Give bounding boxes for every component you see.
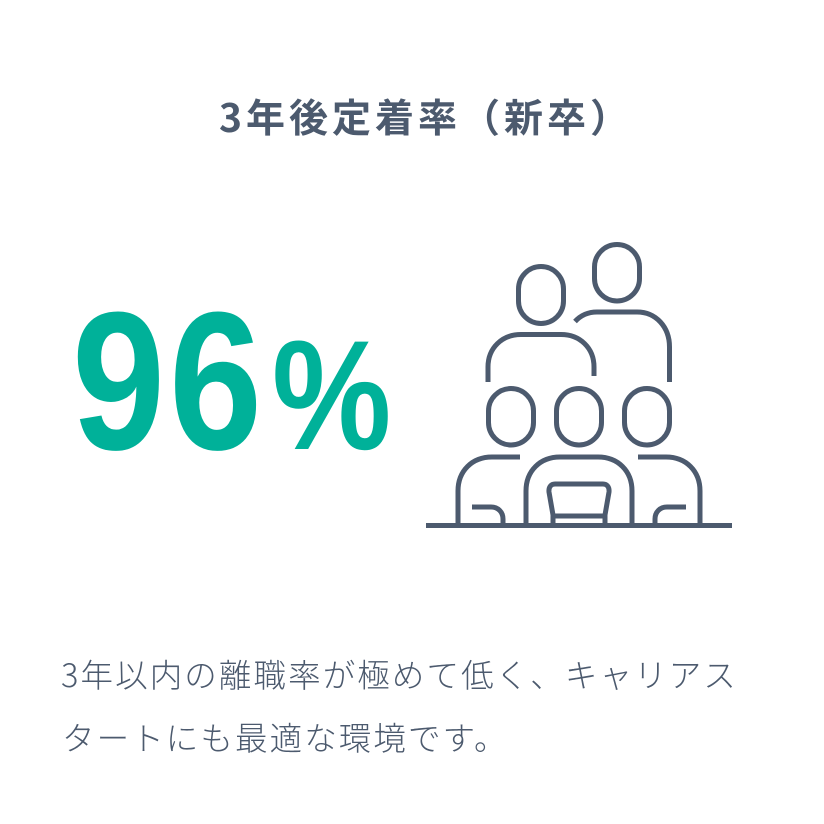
- big number: 96%: 6: [169, 270, 262, 491]
- head: front left person: [488, 388, 534, 445]
- laptop: [549, 484, 609, 525]
- head: back right person: [594, 244, 640, 301]
- big number: 96%: [72, 270, 391, 491]
- head: back left person: [518, 266, 564, 324]
- description text: 3年以内の離職率が極めて低く、キャリアス: [61, 650, 738, 697]
- head: front right person: [624, 388, 670, 445]
- head: front middle person: [556, 388, 602, 445]
- body: front right person: [638, 457, 700, 525]
- title: 3年後定着率（新卒）: [219, 88, 633, 144]
- arm: front right person: [655, 507, 686, 525]
- table: [426, 523, 732, 528]
- arm: front left person: [472, 507, 503, 525]
- icon: team of people at a table: [426, 244, 732, 526]
- body: back left person: [488, 334, 594, 382]
- body: back right person: [575, 312, 670, 382]
- description text: タートにも最適な環境です。: [62, 713, 509, 760]
- big number: 96%: 9: [72, 270, 165, 491]
- description text: [61, 650, 738, 760]
- body: front left person: [458, 457, 520, 525]
- big number: 96%: %: [272, 307, 391, 482]
- body: front middle person: [526, 457, 632, 525]
